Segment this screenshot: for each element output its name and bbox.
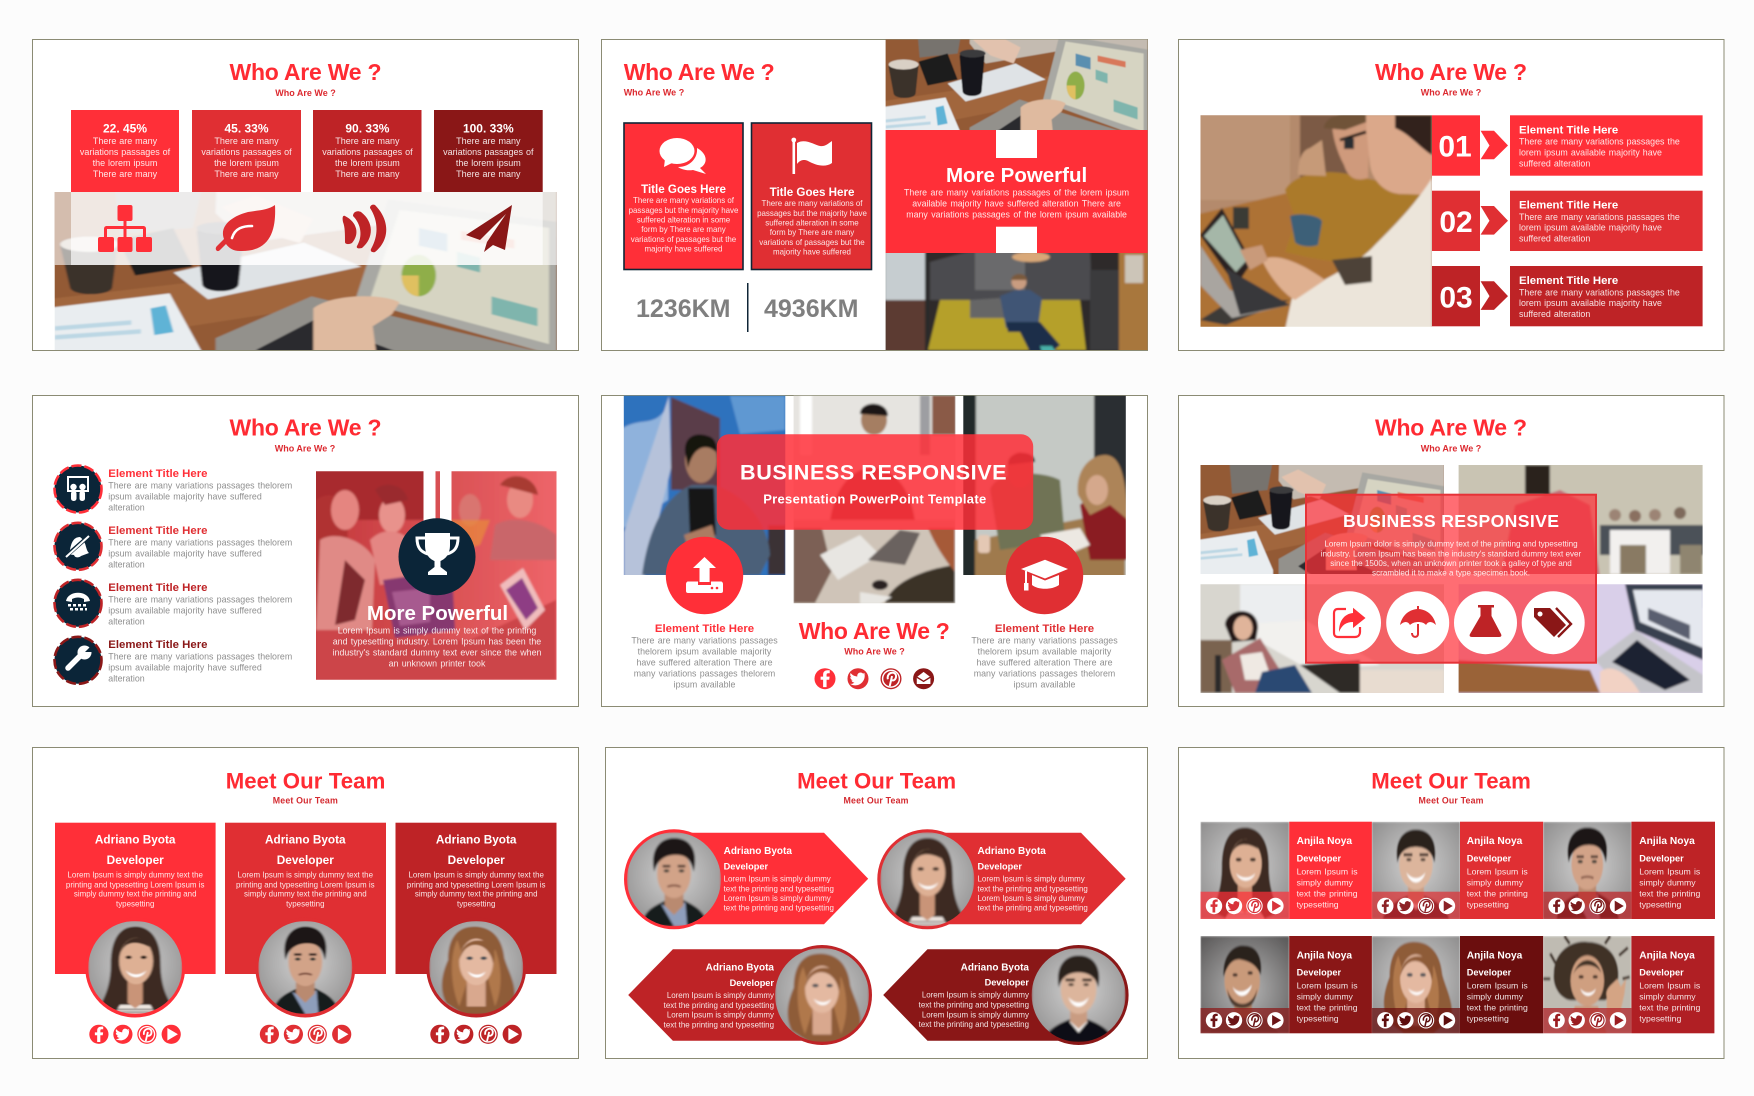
team card 3: simply dummy text the printing and [415,890,538,899]
stat card 3: the lorem ipsum [335,158,400,168]
card: chat: majority have suffered [645,245,722,254]
arrow member 1: Lorem Ipsum is simply dummy [724,874,831,883]
translucent overlay card: Lorem Ipsum dolor is simply dummy text of the printing and typesetting [1324,539,1578,548]
translucent overlay card: industry. Lorem Ipsum has been the industry's standard dummy text ever [1321,549,1582,558]
panel: meet our team, six tiles [1178,748,1724,1058]
row 03: lorem ipsum available majority have [1519,298,1662,308]
social icons [260,1025,351,1044]
stat card 2: 45. 33% [224,122,269,136]
team card 2: Developer [277,853,334,867]
more powerful band [886,130,1148,253]
icon: sound waves [343,205,386,252]
list item 4 [54,637,292,684]
row 01: There are many variations passages the [1519,137,1680,147]
card: flag: Title Goes Here [770,186,855,199]
row 02: 02 [1439,206,1473,239]
member tile 4: Anjila Noya [1297,950,1352,961]
team card 2: Lorem Ipsum is simply dummy text the [238,870,374,879]
arrow member 4: Developer [985,978,1029,988]
icon: slideshare [68,477,88,501]
arrow member 4: text the printing and typesetting [919,1001,1029,1010]
row 03: There are many variations passages the [1519,287,1680,297]
social icons [1206,898,1284,914]
icon: org chart [98,205,152,252]
icon: wrench [68,645,94,668]
row 01: 01 [1438,131,1472,164]
stat card 4: There are many [456,169,521,179]
row 03: Element Title Here [1519,275,1618,287]
photo: speaker and audience [1455,462,1707,578]
stat card 2: variations passages of [201,147,292,157]
team card 1: Adriano Byota [95,832,176,846]
icon: share [1318,591,1381,654]
card: flag: form by There are many [770,228,854,237]
card: chat: variations of passages but the [631,235,737,244]
stat card 2: the lorem ipsum [214,158,279,168]
member tile 4: Developer [1297,968,1341,978]
photo: man on yellow couch [886,253,1148,350]
more powerful text: More Powerful [367,602,508,625]
white tag strips [424,471,452,521]
card: chat: passages but the majority have [629,206,739,215]
row 02: Element Title Here [1519,200,1618,212]
row 01: Element Title Here [1519,124,1618,136]
member tile 2: simply dummy [1467,878,1524,888]
subtitle: Who Are We ? [275,88,336,98]
card: flag: variations of passages but the [759,238,865,247]
member tile 3: Developer [1639,853,1684,863]
icon: tags [1522,591,1585,654]
row 03: 03 [1439,281,1473,314]
member tile 5: typesetting [1467,1014,1509,1024]
title: Meet Our Team [1371,769,1531,794]
member tile 5: text the printing [1467,1003,1528,1013]
member tile 1: Developer [1297,853,1341,863]
more powerful band: There are many variations passages of the lorem ipsum [904,187,1129,197]
team card 3: Adriano Byota [436,832,517,846]
member tile 3: text the printing [1639,889,1700,899]
team card 1: printing and typesetting Lorem Ipsum is [66,880,204,889]
team card 2: typesetting [286,899,324,908]
translucent overlay card: since the 1500s, when an unknown printer took a galley of type and [1330,559,1572,568]
right element text: Element Title Here [995,623,1094,635]
list item 4: There are many variations passages thelorem [108,651,292,661]
arrow member 1: text the printing and typesetting [724,884,834,893]
translucent icon strip [55,192,557,265]
stat card 3: variations passages of [322,147,413,157]
row 01: lorem ipsum available majority have [1519,147,1662,157]
list item 3 [54,580,292,627]
member tile 2: Developer [1467,853,1512,863]
member tile 4: Lorem Ipsum is [1297,980,1358,990]
stat card 4: the lorem ipsum [456,158,521,168]
arrow member 2: Adriano Byota [978,846,1046,857]
row 01: suffered alteration [1519,158,1590,168]
stat card 3: There are many [335,169,400,179]
team card 2: printing and typesetting Lorem Ipsum is [236,880,375,889]
icon: graduation cap circle [1006,537,1083,614]
stat card 3: 90. 33% [345,122,390,136]
icon: chat bubbles [660,138,706,174]
stat card 2 [192,110,301,192]
subtitle: Who Are We ? [1421,444,1481,454]
stat: 4936KM: 4936KM [764,295,858,323]
member tile 2: Anjila Noya [1467,836,1523,847]
card: chat: suffered alteration in some [637,216,731,225]
member tile 1: typesetting [1297,900,1339,910]
arrow member 2: Lorem Ipsum is simply dummy [978,894,1085,903]
more powerful band: many variations passages of the lorem ipsum available [906,210,1127,220]
panel: who are we, icon list and trophy [32,396,578,706]
arrow member 2: text the printing and typesetting [978,904,1088,913]
member tile 4: simply dummy [1297,992,1354,1002]
list item 2: Element Title Here [108,525,207,537]
title: Who Are We ? [799,618,950,644]
member tile 5: Anjila Noya [1467,950,1523,961]
list item 4: alteration [108,673,145,683]
list item 4: ipsum available majority have suffered [108,662,262,672]
member tile 1: simply dummy [1297,878,1354,888]
team card 2 [225,823,386,1044]
member tile 2: text the printing [1467,889,1528,899]
team card 3: typesetting [457,899,495,908]
team card 1 [55,823,216,1044]
subtitle: Meet Our Team [1418,796,1484,806]
team card 2: simply dummy text the printing and [244,890,367,899]
card: chat: form by There are many [641,225,726,234]
right element text: thelorem ipsum available majority [978,646,1112,656]
member tile 3: Anjila Noya [1639,836,1695,847]
card: flag: There are many variations of [761,199,863,208]
right element text: many variations passages thelorem [974,669,1115,679]
member tile 4: typesetting [1297,1014,1339,1024]
panel: who are we, four stat cards [32,39,579,351]
title: Meet Our Team [797,769,956,794]
member tile 6: Lorem Ipsum is [1639,980,1701,990]
stat divider [747,283,748,332]
trophy badge [398,518,476,595]
icon: flask [1454,591,1517,654]
photo: desk [1200,465,1444,574]
row 02 [1432,191,1703,251]
icon: leaf [216,205,275,251]
more powerful text: an unknown printer took [389,659,486,669]
banner: Presentation PowerPoint Template [763,491,986,506]
team card 1: simply dummy text the printing and [74,890,197,899]
list item 2: alteration [108,559,145,569]
title: Who Are We ? [1375,415,1527,441]
member tile 6 [1543,936,1714,1033]
row 02: lorem ipsum available majority have [1519,223,1662,233]
photo: meeting around laptop [790,392,960,607]
stat card 4: 100. 33% [463,122,514,136]
stat card 1: There are many [93,169,158,179]
member tile 1: text the printing [1297,889,1358,899]
photo: desk with laptop [54,192,557,350]
stat card 3 [313,110,422,192]
member tile 5: Lorem Ipsum is [1467,980,1528,990]
member tile 6: simply dummy [1639,992,1696,1002]
list item 3: There are many variations passages thelorem [108,594,292,604]
team card 1: Developer [107,853,164,867]
row 02: There are many variations passages the [1519,212,1680,222]
list item 2: There are many variations passages thelorem [108,537,292,547]
left element text: have suffered alteration There are [636,657,773,667]
more powerful text: Lorem Ipsum is simply dummy text of the printing [338,625,536,635]
card: chat: Title Goes Here [641,183,726,196]
title: Who Are We ? [624,59,775,85]
member tile 4 [1200,936,1372,1033]
photo: red tinted team meeting [310,465,562,685]
photo: two women at laptops [1195,110,1437,332]
arrow member 4 [883,945,1129,1045]
translucent overlay card [1306,495,1596,663]
stat card 1: variations passages of [80,147,171,157]
stat card 4: variations passages of [443,147,534,157]
social icons [89,1025,181,1044]
stat: 1236KM: 1236KM [636,295,730,323]
list item 3: Element Title Here [108,582,207,594]
more powerful text [333,602,541,669]
member tile 6: text the printing [1639,1003,1700,1013]
icon: umbrella [1386,591,1449,654]
icon: trophy [417,533,458,575]
left element text [631,623,778,689]
social icons [1377,898,1455,914]
arrow member 4: text the printing and typesetting [919,1020,1029,1029]
row 03 [1432,266,1703,326]
title: Who Are We ? [230,59,382,85]
list item 1: There are many variations passages thelorem [108,480,292,490]
photo: laptop with purple light [1455,582,1707,695]
panel: who are we, numbered list [1178,40,1724,350]
right element text [971,623,1118,689]
team card 3: printing and typesetting Lorem Ipsum is [407,880,545,889]
stat card 4: There are many [456,136,521,146]
panel: business responsive banner with three photos [602,392,1148,706]
stat card 1: the lorem ipsum [93,158,157,168]
member tile 4: text the printing [1297,1003,1358,1013]
card: flag: suffered alteration in some [765,218,859,227]
list item 3: alteration [108,616,145,626]
card: flag: majority have suffered [773,247,851,256]
arrow member 3: Lorem Ipsum is simply dummy [667,1011,774,1020]
arrow member 3: text the printing and typesetting [664,1020,774,1029]
icon: flag [791,138,832,174]
right element text: ipsum available [1014,679,1075,689]
member tile 6: Developer [1639,968,1684,978]
arrow member 3: Lorem Ipsum is simply dummy [667,991,774,1000]
arrow member 2: Lorem Ipsum is simply dummy [978,874,1085,883]
translucent overlay card: scrambled it to make a type specimen book. [1372,569,1530,578]
subtitle: Who Are We ? [275,444,335,454]
stat card 2: There are many [214,136,279,146]
more powerful text: industry's standard dummy text ever since the when [333,648,541,658]
member tile 2: typesetting [1467,900,1509,910]
photo: colleagues at table [960,392,1130,578]
card: flag: passages but the majority have [757,209,868,218]
team card 1: Lorem Ipsum is simply dummy text the [67,870,203,879]
panel: meet our team, three cards [32,748,578,1058]
member tile 5: Developer [1467,968,1512,978]
left element text: thelorem ipsum available majority [638,646,772,656]
stat card 3: There are many [335,136,400,146]
arrow member 4: Lorem Ipsum is simply dummy [922,1010,1029,1019]
list item 4: Element Title Here [108,639,207,651]
team card 3 [396,823,556,1044]
arrow member 2 [877,829,1126,929]
subtitle: Meet Our Team [273,796,338,806]
member tile 1 [1200,822,1372,919]
stat card 1 [71,110,179,192]
team card 1: typesetting [116,899,154,908]
arrow member 4: Lorem Ipsum is simply dummy [922,991,1029,1000]
card: chat [624,123,743,270]
member tile 2: Lorem Ipsum is [1467,866,1528,876]
list item 1: ipsum available majority have suffered [108,491,262,501]
arrow member 1: text the printing and typesetting [724,904,834,913]
team card 3: Lorem Ipsum is simply dummy text the [408,870,544,879]
subtitle: Who Are We ? [1421,88,1481,98]
member tile 2 [1372,822,1543,919]
subtitle: Who Are We ? [844,646,905,656]
subtitle: Who Are We ? [624,88,684,98]
arrow member 3 [628,945,872,1045]
subtitle: Meet Our Team [844,796,909,806]
icon: muted bell [65,535,90,557]
title: Meet Our Team [226,769,385,794]
member tile 3: Lorem Ipsum is [1639,866,1701,876]
left element text: many variations passages thelorem [634,669,775,679]
arrow member 2: text the printing and typesetting [978,884,1088,893]
arrow member 1: Lorem Ipsum is simply dummy [724,894,831,903]
panel: meet our team, arrows [606,748,1148,1058]
icon: paper plane [466,205,512,252]
right element text: There are many variations passages [971,635,1118,645]
arrow member 2: Developer [978,861,1022,871]
portrait [426,918,526,1018]
social icons [430,1025,522,1044]
left element text: Element Title Here [655,623,754,635]
banner [717,434,1033,530]
banner: BUSINESS RESPONSIVE [740,460,1007,485]
team card 3: Developer [448,853,505,867]
list item 2 [54,523,292,570]
member tile 5: simply dummy [1467,992,1524,1002]
stat card 1: There are many [93,136,158,146]
row 01 [1432,115,1703,176]
social icons [1377,1012,1455,1028]
member tile 6: Anjila Noya [1639,950,1695,961]
right element text: have suffered alteration There are [976,657,1113,667]
row 02: suffered alteration [1519,234,1590,244]
panel: who are we, title cards and more powerful band [601,39,1148,351]
portrait [255,918,355,1018]
social icons [1548,898,1626,914]
arrow member 3: Adriano Byota [706,963,774,974]
panel: business responsive with four photos [1178,396,1724,706]
stat card 4 [434,110,543,192]
left element text: ipsum available [674,679,735,689]
translucent overlay card: BUSINESS RESPONSIVE [1343,511,1559,531]
list item 1: alteration [108,502,145,512]
photo: woman in office [1198,582,1446,695]
icon: upload circle [666,537,743,614]
more powerful text: and typesetting industry. Lorem Ipsum has been the [333,636,541,646]
stat card 2: There are many [214,169,279,179]
more powerful band: More Powerful [946,164,1087,187]
list item 2: ipsum available majority have suffered [108,548,262,558]
more powerful band: available majority have suffered alteration There are [912,198,1121,208]
member tile 3 [1543,822,1715,919]
arrow member 3: text the printing and typesetting [664,1001,774,1010]
member tile 1: Lorem Ipsum is [1297,866,1358,876]
social icons [1206,1012,1284,1028]
title: Who Are We ? [230,415,382,441]
arrow member 4: Adriano Byota [961,962,1029,973]
card: chat: There are many variations of [633,196,735,205]
member tile 1: Anjila Noya [1297,836,1352,847]
social icons [814,668,934,689]
arrow member 3: Developer [730,978,774,988]
photo: man in suit and tower [620,392,790,578]
portrait [85,918,185,1018]
arrow member 1: Adriano Byota [724,846,792,857]
left element text: There are many variations passages [631,635,778,645]
team card 2: Adriano Byota [265,832,346,846]
icon: keypad telephone [66,593,90,610]
photo: desk from above [886,40,1148,130]
member tile 6: typesetting [1639,1014,1681,1024]
arrow member 1: Developer [724,861,768,871]
arrow member 1 [624,829,868,929]
row 03: suffered alteration [1519,309,1590,319]
card: flag [752,123,872,270]
social icons [1548,1012,1626,1028]
list item 1: Element Title Here [108,468,207,480]
member tile 5 [1372,936,1543,1033]
stat card 1: 22. 45% [103,122,147,136]
list item 1 [54,466,292,512]
list item 3: ipsum available majority have suffered [108,605,262,615]
title: Who Are We ? [1375,59,1527,85]
member tile 3: typesetting [1639,900,1681,910]
member tile 3: simply dummy [1639,878,1696,888]
